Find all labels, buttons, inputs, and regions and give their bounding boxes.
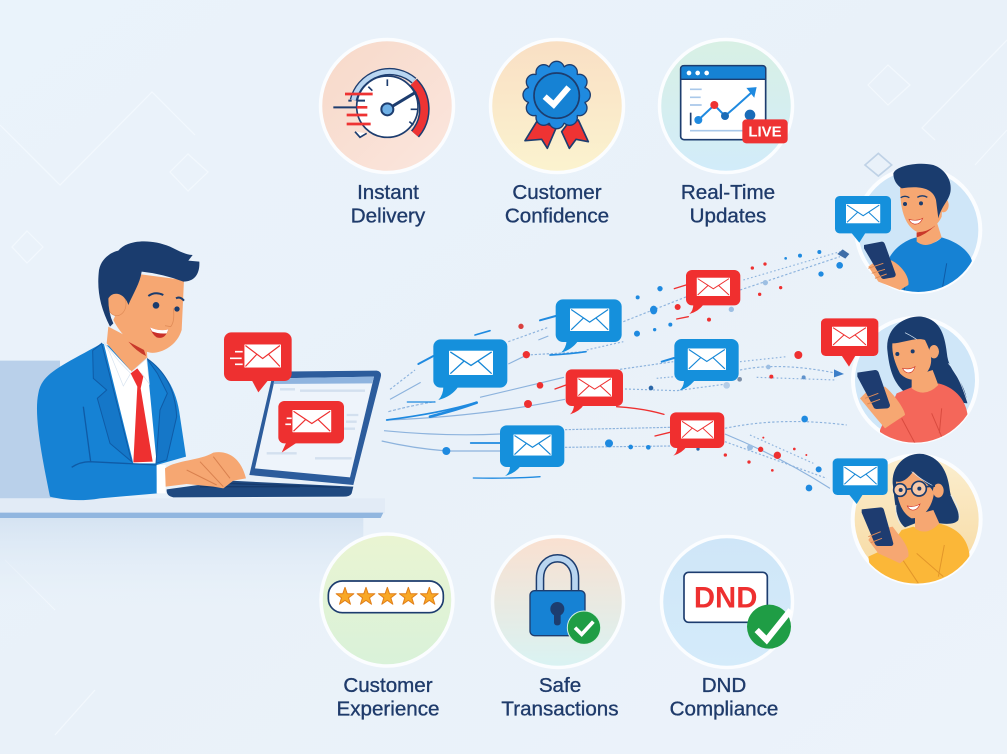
- card: Customer Confidence: [490, 40, 624, 228]
- person: woman with phone: [821, 316, 979, 447]
- icon: DND check: [684, 572, 791, 649]
- bubble: person mail: [833, 458, 888, 504]
- label: DND: [702, 674, 746, 697]
- flow lines: [382, 252, 847, 488]
- businessman at laptop: [0, 241, 385, 617]
- bubble: red 1: [686, 270, 740, 314]
- icon: screen mail bubble: [278, 401, 344, 453]
- label: Safe: [539, 674, 581, 697]
- icon: speedometer: [333, 72, 424, 137]
- label: Updates: [690, 204, 766, 228]
- bubble: blue 2: [556, 299, 622, 353]
- bubble: red 2: [566, 369, 623, 414]
- icon: floating mail bubble: [224, 332, 292, 392]
- card: Real-Time Updates: [660, 40, 792, 228]
- bubble: blue 4: [500, 425, 564, 476]
- bubble: person mail: [821, 318, 878, 367]
- label: Experience: [336, 698, 440, 720]
- hand: [157, 452, 246, 493]
- card: Instant Delivery: [320, 40, 454, 228]
- arrowheads: [834, 369, 844, 377]
- swooshes: [387, 316, 674, 478]
- dots: [442, 250, 843, 491]
- person: man with phone: [835, 153, 982, 300]
- label: Transactions: [501, 698, 619, 720]
- icon: live chart window: [681, 66, 788, 143]
- icon: rosette badge: [522, 61, 591, 148]
- chair: [0, 361, 60, 498]
- message stream: [382, 249, 849, 491]
- label: Customer: [512, 181, 602, 204]
- person: woman with glasses: [833, 453, 983, 590]
- man figure: [37, 241, 199, 500]
- label: Confidence: [505, 204, 609, 228]
- icon: five star rating: [328, 581, 443, 613]
- desk: [0, 498, 385, 617]
- label: Real-Time: [681, 181, 775, 204]
- bubble: blue 1: [433, 339, 507, 400]
- laptop: [167, 371, 381, 497]
- bubble: red 3: [670, 412, 724, 456]
- bubble: blue 3: [674, 339, 739, 391]
- icon: live chart window: LIVE: [748, 123, 782, 140]
- label: Compliance: [670, 698, 778, 720]
- card: Customer Experience: [321, 534, 453, 720]
- icon: DND check: DND: [694, 582, 757, 615]
- label: Instant: [357, 181, 419, 204]
- label: Customer: [343, 674, 433, 697]
- card: DND Compliance: [662, 536, 792, 720]
- label: Delivery: [351, 204, 426, 228]
- card: Safe Transactions: [492, 536, 624, 720]
- bubble: person mail: [835, 196, 891, 243]
- icon: padlock: [530, 558, 601, 644]
